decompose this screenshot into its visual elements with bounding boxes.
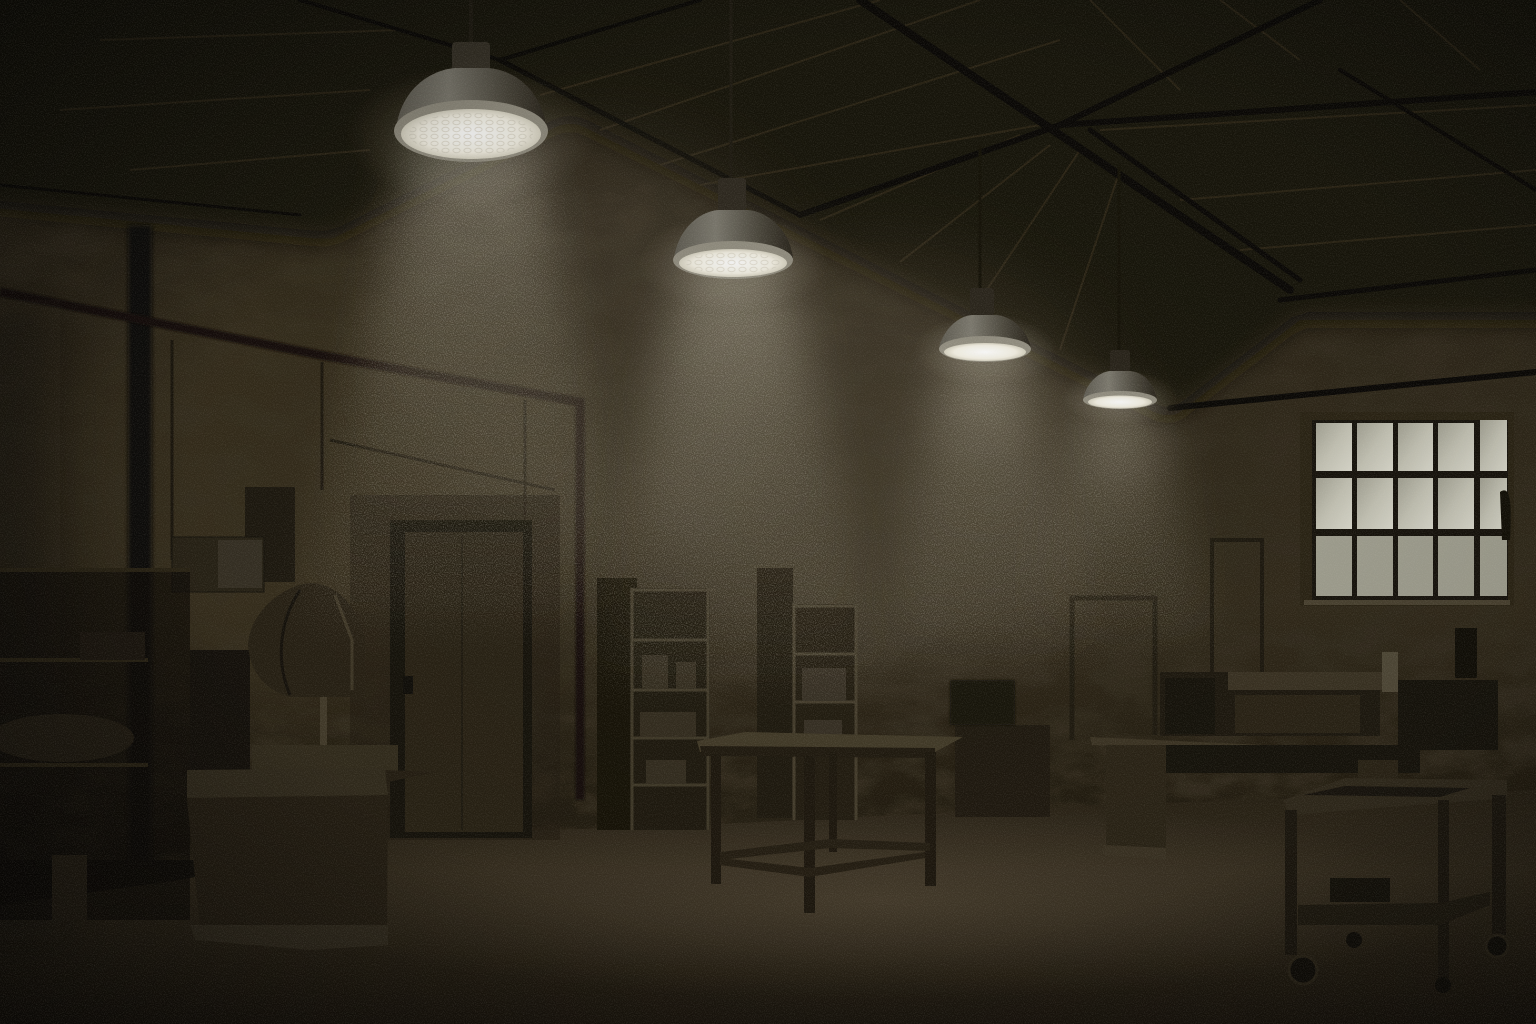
wall tool on right edge [1500,490,1511,540]
beam grain [296,152,1212,694]
pendant lamp 3 [913,145,1057,386]
centre table [697,732,963,913]
wheeled cart [1283,760,1508,993]
light beams [310,150,1210,680]
wall surface stains [0,180,1536,860]
pendant lamp 1 [346,0,596,205]
floor light pool [280,800,1480,1000]
pendant lamp 2 [638,0,828,312]
ceiling with trusses [0,0,1536,420]
shelving unit left [597,578,716,830]
left shelving [0,570,190,920]
shelving unit centre [757,568,858,820]
workbench right with machinery [1090,628,1498,860]
left wall structure: pipes and panels [0,225,580,940]
back cabinet and door frame [950,540,1262,817]
warm light on left wall [50,250,590,710]
pendant lamp 4 [1062,165,1178,426]
door [350,495,560,840]
large machine left [187,583,435,950]
window [1300,412,1514,606]
light haze from lamps [390,130,1120,670]
floor [0,790,1536,1024]
